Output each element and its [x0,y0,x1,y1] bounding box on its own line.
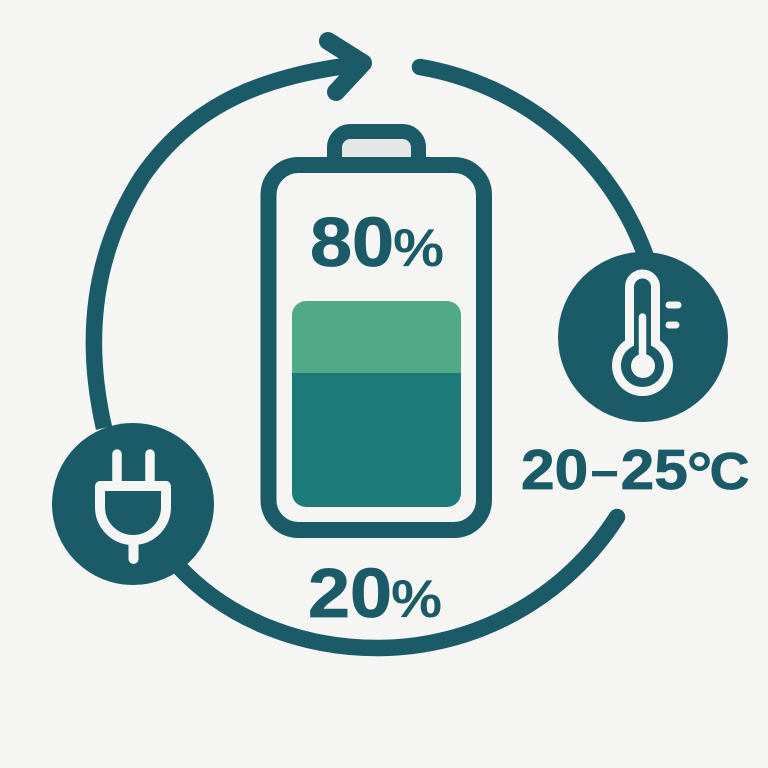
battery terminal [334,132,418,172]
icon: thermometer [616,274,678,392]
label: 80%: % [393,218,444,278]
label: temperature range: ° [686,439,713,509]
battery level: lower teal [292,373,461,507]
plug cord [128,540,138,559]
label: 80%: 80 [310,204,394,281]
plug body [100,486,166,540]
arc: plug to temperature label [178,517,617,648]
label: temperature range: 25 [621,439,688,502]
label: 20%: 20 [308,555,392,632]
thermometer outline [616,274,669,392]
thermometer ticks [669,305,678,325]
battery body [268,165,484,530]
plug prongs [117,454,150,484]
battery [268,132,484,530]
cycle ring [94,41,645,648]
badge circle [52,423,214,585]
arc: plug to arrow [94,64,360,428]
arrow head [328,41,363,92]
thermometer badge [558,252,728,422]
label: temperature range: C [710,442,749,501]
arc: arrow gap to thermometer [420,67,645,254]
thermometer stem [639,317,646,366]
label: temperature range: 20 [521,439,588,502]
label: 20%: % [391,569,442,629]
thermometer bulb [631,354,655,378]
icon: plug [100,454,166,559]
plug badge [52,423,214,585]
battery level: upper light green [292,301,461,373]
label: temperature range: – [591,445,618,497]
badge circle [558,252,728,422]
